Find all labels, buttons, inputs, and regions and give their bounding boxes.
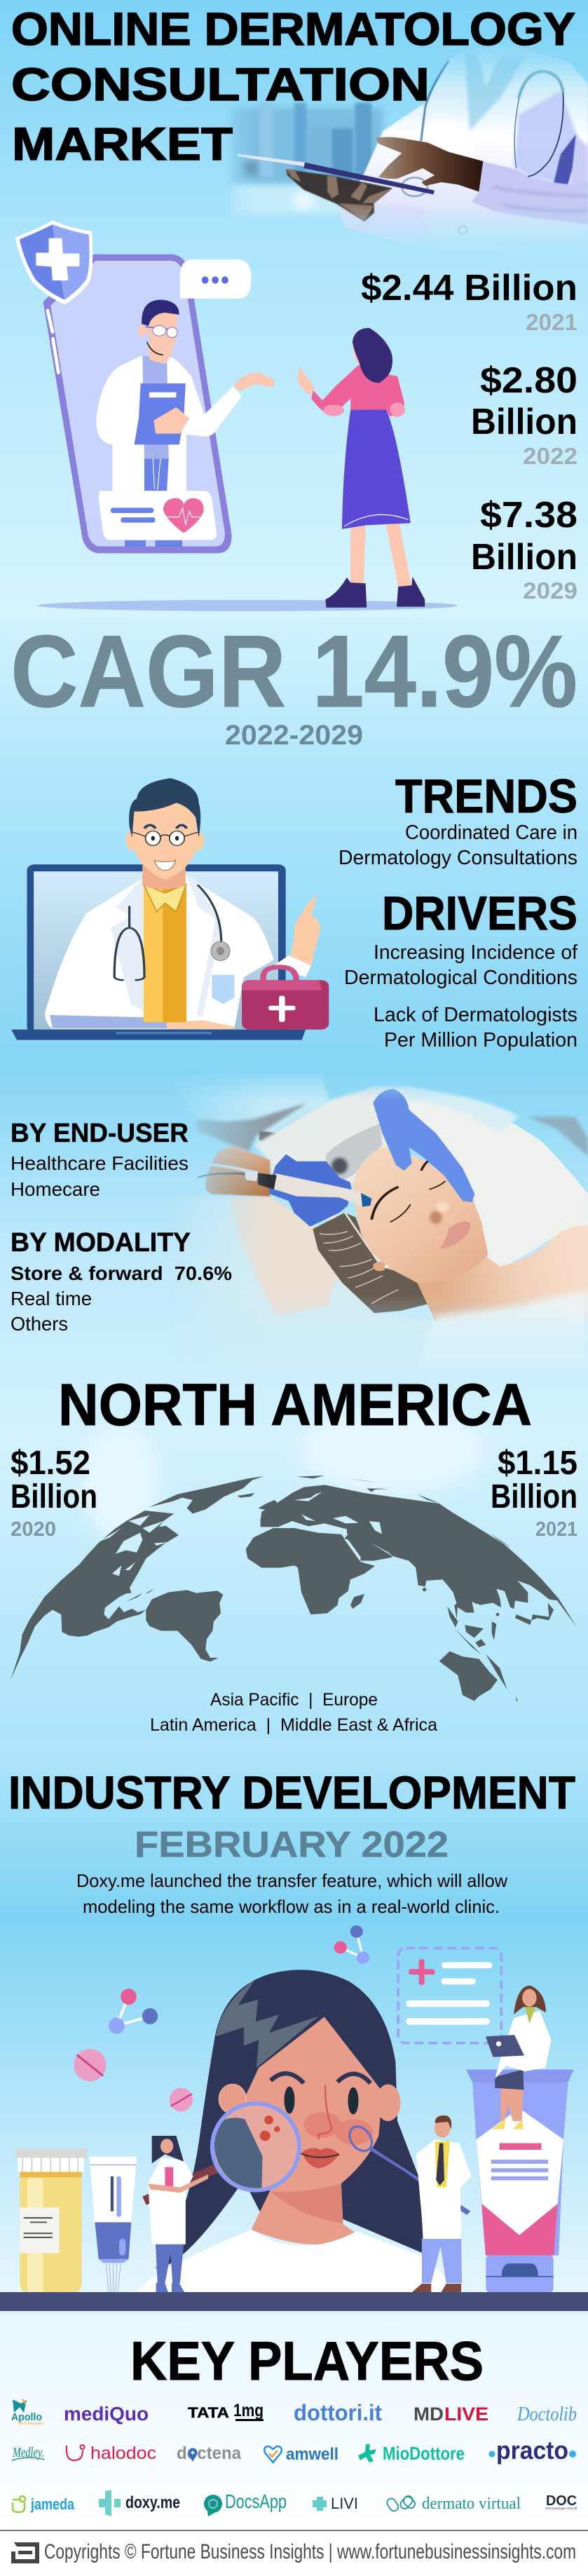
- market size figures: Billion: [471, 537, 577, 578]
- by end-user: Homecare: [11, 1178, 100, 1200]
- logo: halodoc: halodoc: [90, 2444, 156, 2463]
- logos: key players: [11, 2399, 577, 2516]
- logo: TATA: TATA: [188, 2405, 229, 2421]
- other regions: [150, 1690, 437, 1735]
- by end-user: Healthcare Facilities: [11, 1152, 189, 1174]
- market size figures: $2.80: [480, 360, 577, 401]
- logo: MioDottore: MioDottore: [383, 2443, 465, 2464]
- north america figures: Billion: [11, 1478, 97, 1515]
- north america figures: $1.15: [498, 1445, 577, 1482]
- footer rule: [0, 2530, 588, 2531]
- by modality: [11, 1228, 232, 1335]
- logo: LIVI: LIVI: [331, 2495, 358, 2512]
- logo: MD: MD: [413, 2404, 444, 2425]
- logo: halodoc icon: [67, 2445, 84, 2460]
- logo: Doctolib: Doctolib: [517, 2404, 577, 2425]
- north america figures: 2021: [535, 1518, 577, 1541]
- photo: skin treatment: [168, 1072, 588, 1372]
- by modality: Others: [11, 1313, 68, 1335]
- logo: DOC: Dermatologist OnCall: [546, 2507, 577, 2510]
- CAGR: 2022-2029: [225, 720, 363, 751]
- industry development: [8, 1766, 575, 1917]
- heading: north america: NORTH AMERICA: [58, 1372, 532, 1438]
- footer: [11, 2540, 576, 2563]
- other regions: Asia Pacific | Europe: [210, 1690, 378, 1710]
- industry development: Doxy.me launched the transfer feature, which will allow: [76, 1870, 507, 1891]
- logo: dermato virtual icon: [385, 2494, 417, 2513]
- illustration: doctor on laptop: [11, 778, 329, 1040]
- by end-user: [11, 1119, 189, 1200]
- market size figures: 2021: [526, 309, 577, 335]
- logo: 1mg: 1mg: [233, 2401, 264, 2420]
- trends: TRENDS: [395, 770, 577, 823]
- logo: DocsApp icon: [204, 2495, 222, 2516]
- logo: fortune business insights: [11, 2542, 39, 2563]
- logo: DocsApp: DocsApp: [225, 2490, 287, 2512]
- heading: key players: KEY PLAYERS: [130, 2330, 484, 2392]
- logo: doctena pin: [188, 2448, 198, 2462]
- illustration: woman patient: [37, 328, 458, 611]
- logo: amwell icon: [264, 2446, 282, 2462]
- market size figures: $2.44 Billion: [361, 268, 577, 308]
- logo: jameda icon: [13, 2496, 25, 2512]
- drivers: Dermatological Conditions: [344, 967, 577, 989]
- logo: Medley: Medley.: [12, 2445, 44, 2460]
- market size figures: Billion: [471, 402, 577, 442]
- title: ONLINE DERMATOLOGY: [11, 3, 575, 55]
- by modality: Real time: [11, 1288, 92, 1309]
- logo: jameda: jameda: [30, 2495, 75, 2513]
- world map: [11, 1476, 577, 1701]
- ground bar: [0, 2292, 588, 2311]
- logo: practo: practo: [496, 2436, 568, 2465]
- industry development: modeling the same workflow as in a real-world clinic.: [83, 1896, 500, 1917]
- drivers: Per Million Population: [384, 1029, 577, 1051]
- logo: doxy.me icon: [99, 2490, 121, 2516]
- by modality: Store & forward 70.6%: [11, 1262, 232, 1284]
- logo: Apollo: Apollo: [11, 2411, 42, 2423]
- by end-user: BY END-USER: [11, 1119, 189, 1148]
- logo: dottori.it: dottori.it: [294, 2400, 382, 2425]
- trends: [339, 770, 577, 869]
- market size figures: $7.38: [480, 495, 577, 536]
- industry development: FEBRUARY 2022: [135, 1825, 449, 1865]
- drivers: Lack of Dermatologists: [374, 1004, 577, 1026]
- logo: practo end dot: [569, 2451, 576, 2458]
- trends: Coordinated Care in: [405, 822, 577, 844]
- logo: doxy.me: doxy.me: [125, 2493, 180, 2512]
- trends: Dermatology Consultations: [339, 847, 577, 869]
- north america figures: [11, 1445, 577, 1541]
- logo: amwell: amwell: [286, 2445, 339, 2464]
- logo: mediQuo: mediQuo: [64, 2403, 149, 2425]
- title: MARKET: [12, 118, 233, 170]
- illustration: skin examination: [15, 1926, 574, 2294]
- drivers: [344, 887, 578, 1051]
- north america figures: 2020: [11, 1518, 56, 1541]
- title: [11, 3, 575, 170]
- drivers: Increasing Incidence of: [374, 941, 578, 964]
- north america figures: $1.52: [11, 1445, 90, 1482]
- photo: doctor hand on tablet: [231, 44, 588, 252]
- logo: practo start dot: [489, 2451, 495, 2458]
- logo: LIVE: LIVE: [444, 2404, 488, 2425]
- logo: doctena: doctena: [177, 2444, 242, 2463]
- market size figures: [361, 268, 577, 604]
- title: CONSULTATION: [11, 58, 430, 110]
- by modality: BY MODALITY: [11, 1228, 191, 1258]
- logo: LIVI icon: [313, 2497, 327, 2511]
- logo: dermato virtual: dermato virtual: [422, 2495, 521, 2513]
- drivers: DRIVERS: [382, 887, 577, 940]
- logo: DOC: DOC: [546, 2493, 577, 2509]
- market size figures: 2022: [523, 443, 577, 469]
- illustration: doctor in phone with shield: [15, 221, 275, 553]
- logo: MioDottore icon: [358, 2444, 376, 2462]
- other regions: Latin America | Middle East & Africa: [150, 1715, 437, 1735]
- logo: Apollo sub-label: TeleHealth: [18, 2422, 43, 2426]
- logo: Apollo icon: [13, 2399, 27, 2413]
- market size figures: 2029: [523, 578, 577, 604]
